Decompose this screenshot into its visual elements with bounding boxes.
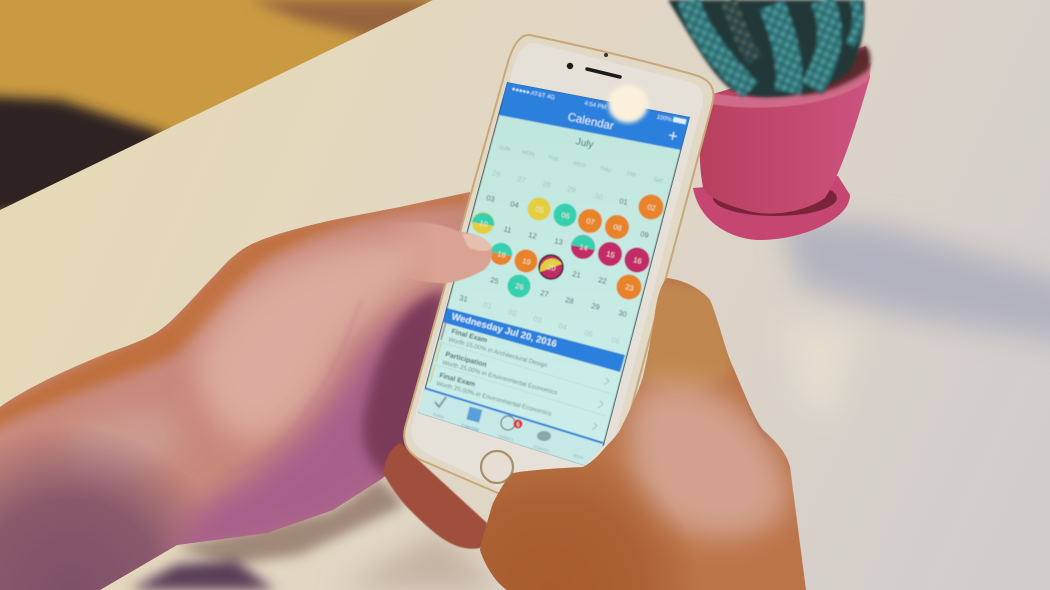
calendar day numbers: 03 bbox=[485, 193, 496, 204]
phone body bbox=[404, 35, 713, 510]
right hand bbox=[470, 270, 806, 590]
pale back of hand bbox=[628, 382, 790, 539]
lower finger under phone bbox=[383, 443, 487, 549]
weekday labels: TUE bbox=[547, 155, 560, 163]
calendar day numbers: 16 bbox=[632, 255, 643, 266]
calendar day numbers: 04 bbox=[557, 321, 568, 332]
left thumb over the screen bbox=[385, 222, 492, 283]
calendar day numbers: 01 bbox=[618, 196, 629, 207]
calendar day numbers: 30 bbox=[593, 191, 604, 202]
calendar day numbers: 12 bbox=[527, 230, 538, 241]
calendar day numbers: 07 bbox=[585, 216, 596, 227]
calendar day numbers: 15 bbox=[605, 249, 616, 260]
assignment list: Worth 25.00% in Environmental Economics bbox=[435, 380, 552, 418]
calendar day numbers: 06 bbox=[560, 210, 571, 221]
phone screen: July bbox=[575, 136, 594, 151]
phone screen bbox=[418, 82, 690, 467]
calendar day numbers: 05 bbox=[583, 328, 594, 339]
calendar day numbers: 29 bbox=[566, 184, 577, 195]
phone screen: Classes bbox=[533, 444, 550, 453]
cactus plant bbox=[668, 0, 864, 97]
phone screen: Today bbox=[432, 412, 446, 420]
weekday labels: MON bbox=[521, 150, 535, 158]
calendar day numbers: 25 bbox=[489, 275, 500, 286]
weekday labels bbox=[498, 145, 665, 185]
calendar day numbers: 01 bbox=[482, 300, 493, 311]
top orange light on hand bbox=[0, 190, 470, 435]
assignment list: Final Exam bbox=[438, 372, 476, 389]
assignment list bbox=[430, 322, 612, 430]
header text: + bbox=[667, 127, 679, 146]
header text bbox=[512, 87, 678, 140]
calendar day numbers: 11 bbox=[503, 224, 512, 235]
weekday labels: WED bbox=[572, 161, 586, 169]
assignment list: Worth 25.00% in Environmental Economics bbox=[441, 359, 558, 397]
calendar day numbers: 29 bbox=[590, 301, 601, 312]
calendar day numbers: 10 bbox=[478, 218, 489, 229]
calendar day numbers: 28 bbox=[541, 179, 552, 190]
calendar day numbers: 28 bbox=[564, 295, 575, 306]
calendar day numbers bbox=[458, 168, 657, 346]
weekday labels: THU bbox=[599, 166, 611, 174]
header text: ●●●●● AT&T 4G bbox=[511, 87, 556, 102]
earpiece bbox=[587, 69, 620, 77]
calendar day numbers: 03 bbox=[532, 314, 543, 325]
weekday labels: SAT bbox=[653, 177, 665, 185]
arm highlight bbox=[72, 406, 179, 472]
deep palm shadow bbox=[363, 290, 445, 478]
header text: 4:54 PM bbox=[584, 101, 607, 111]
calendar day numbers: 23 bbox=[624, 282, 635, 293]
thumbnail bbox=[462, 234, 492, 251]
tab bar bbox=[418, 387, 603, 467]
calendar day numbers: 20 bbox=[546, 262, 557, 273]
calendar day numbers: 26 bbox=[514, 281, 525, 292]
phone screen: Wednesday Jul 20, 2016 bbox=[450, 311, 558, 350]
phone screen: Updates bbox=[497, 433, 515, 442]
header bar bbox=[499, 82, 690, 150]
calendar day numbers: 27 bbox=[516, 174, 527, 185]
assignment list: Final Exam bbox=[450, 328, 488, 345]
calendar day numbers: 13 bbox=[553, 236, 564, 247]
header text: Calendar bbox=[567, 111, 615, 133]
calendar day numbers: 05 bbox=[534, 204, 545, 215]
calendar day numbers: 18 bbox=[496, 249, 507, 260]
phone screen: More bbox=[573, 453, 584, 460]
date banner bbox=[442, 308, 625, 372]
wrist crease bbox=[346, 302, 362, 336]
header text: 100% bbox=[656, 114, 673, 124]
calendar day numbers: 09 bbox=[639, 229, 650, 240]
pale back of hand highlight bbox=[198, 235, 440, 440]
calendar day numbers: 22 bbox=[597, 275, 608, 286]
calendar day numbers: 04 bbox=[509, 199, 520, 210]
weekday labels: SUN bbox=[498, 145, 511, 153]
calendar day numbers: 30 bbox=[617, 308, 628, 319]
assignment list: Worth 15.00% in Architectural Design bbox=[447, 336, 549, 370]
calendar day numbers: 08 bbox=[612, 222, 623, 233]
shadow under left hand bbox=[130, 478, 500, 590]
calendar day numbers: 31 bbox=[458, 293, 469, 304]
weekday labels: FRI bbox=[626, 171, 637, 179]
home button bbox=[481, 451, 513, 483]
thumb warm tone bbox=[642, 281, 734, 388]
calendar day numbers: 02 bbox=[507, 307, 518, 318]
calendar day numbers: 19 bbox=[521, 256, 532, 267]
calendar day numbers: 21 bbox=[571, 269, 582, 280]
calendar day numbers: 06 bbox=[610, 335, 621, 346]
calendar day numbers: 14 bbox=[578, 242, 589, 253]
left hand bbox=[0, 190, 500, 590]
calendar day numbers: 26 bbox=[491, 168, 502, 179]
plant pot with saucer bbox=[693, 46, 871, 240]
phone screen: 6 bbox=[516, 422, 520, 428]
lower arm purple bbox=[0, 434, 196, 590]
dark orange lower knuckles bbox=[480, 460, 676, 590]
calendar day numbers: 02 bbox=[646, 202, 657, 213]
calendar day circles bbox=[472, 194, 664, 300]
shadowed hand edge bbox=[750, 410, 769, 440]
assignment list: Participation bbox=[444, 351, 487, 369]
phone screen: Calendar bbox=[461, 423, 480, 432]
glare on camera lens bbox=[608, 85, 648, 123]
camera bbox=[567, 63, 573, 69]
lower palm magenta bbox=[168, 294, 422, 549]
calendar day numbers: 27 bbox=[539, 288, 550, 299]
